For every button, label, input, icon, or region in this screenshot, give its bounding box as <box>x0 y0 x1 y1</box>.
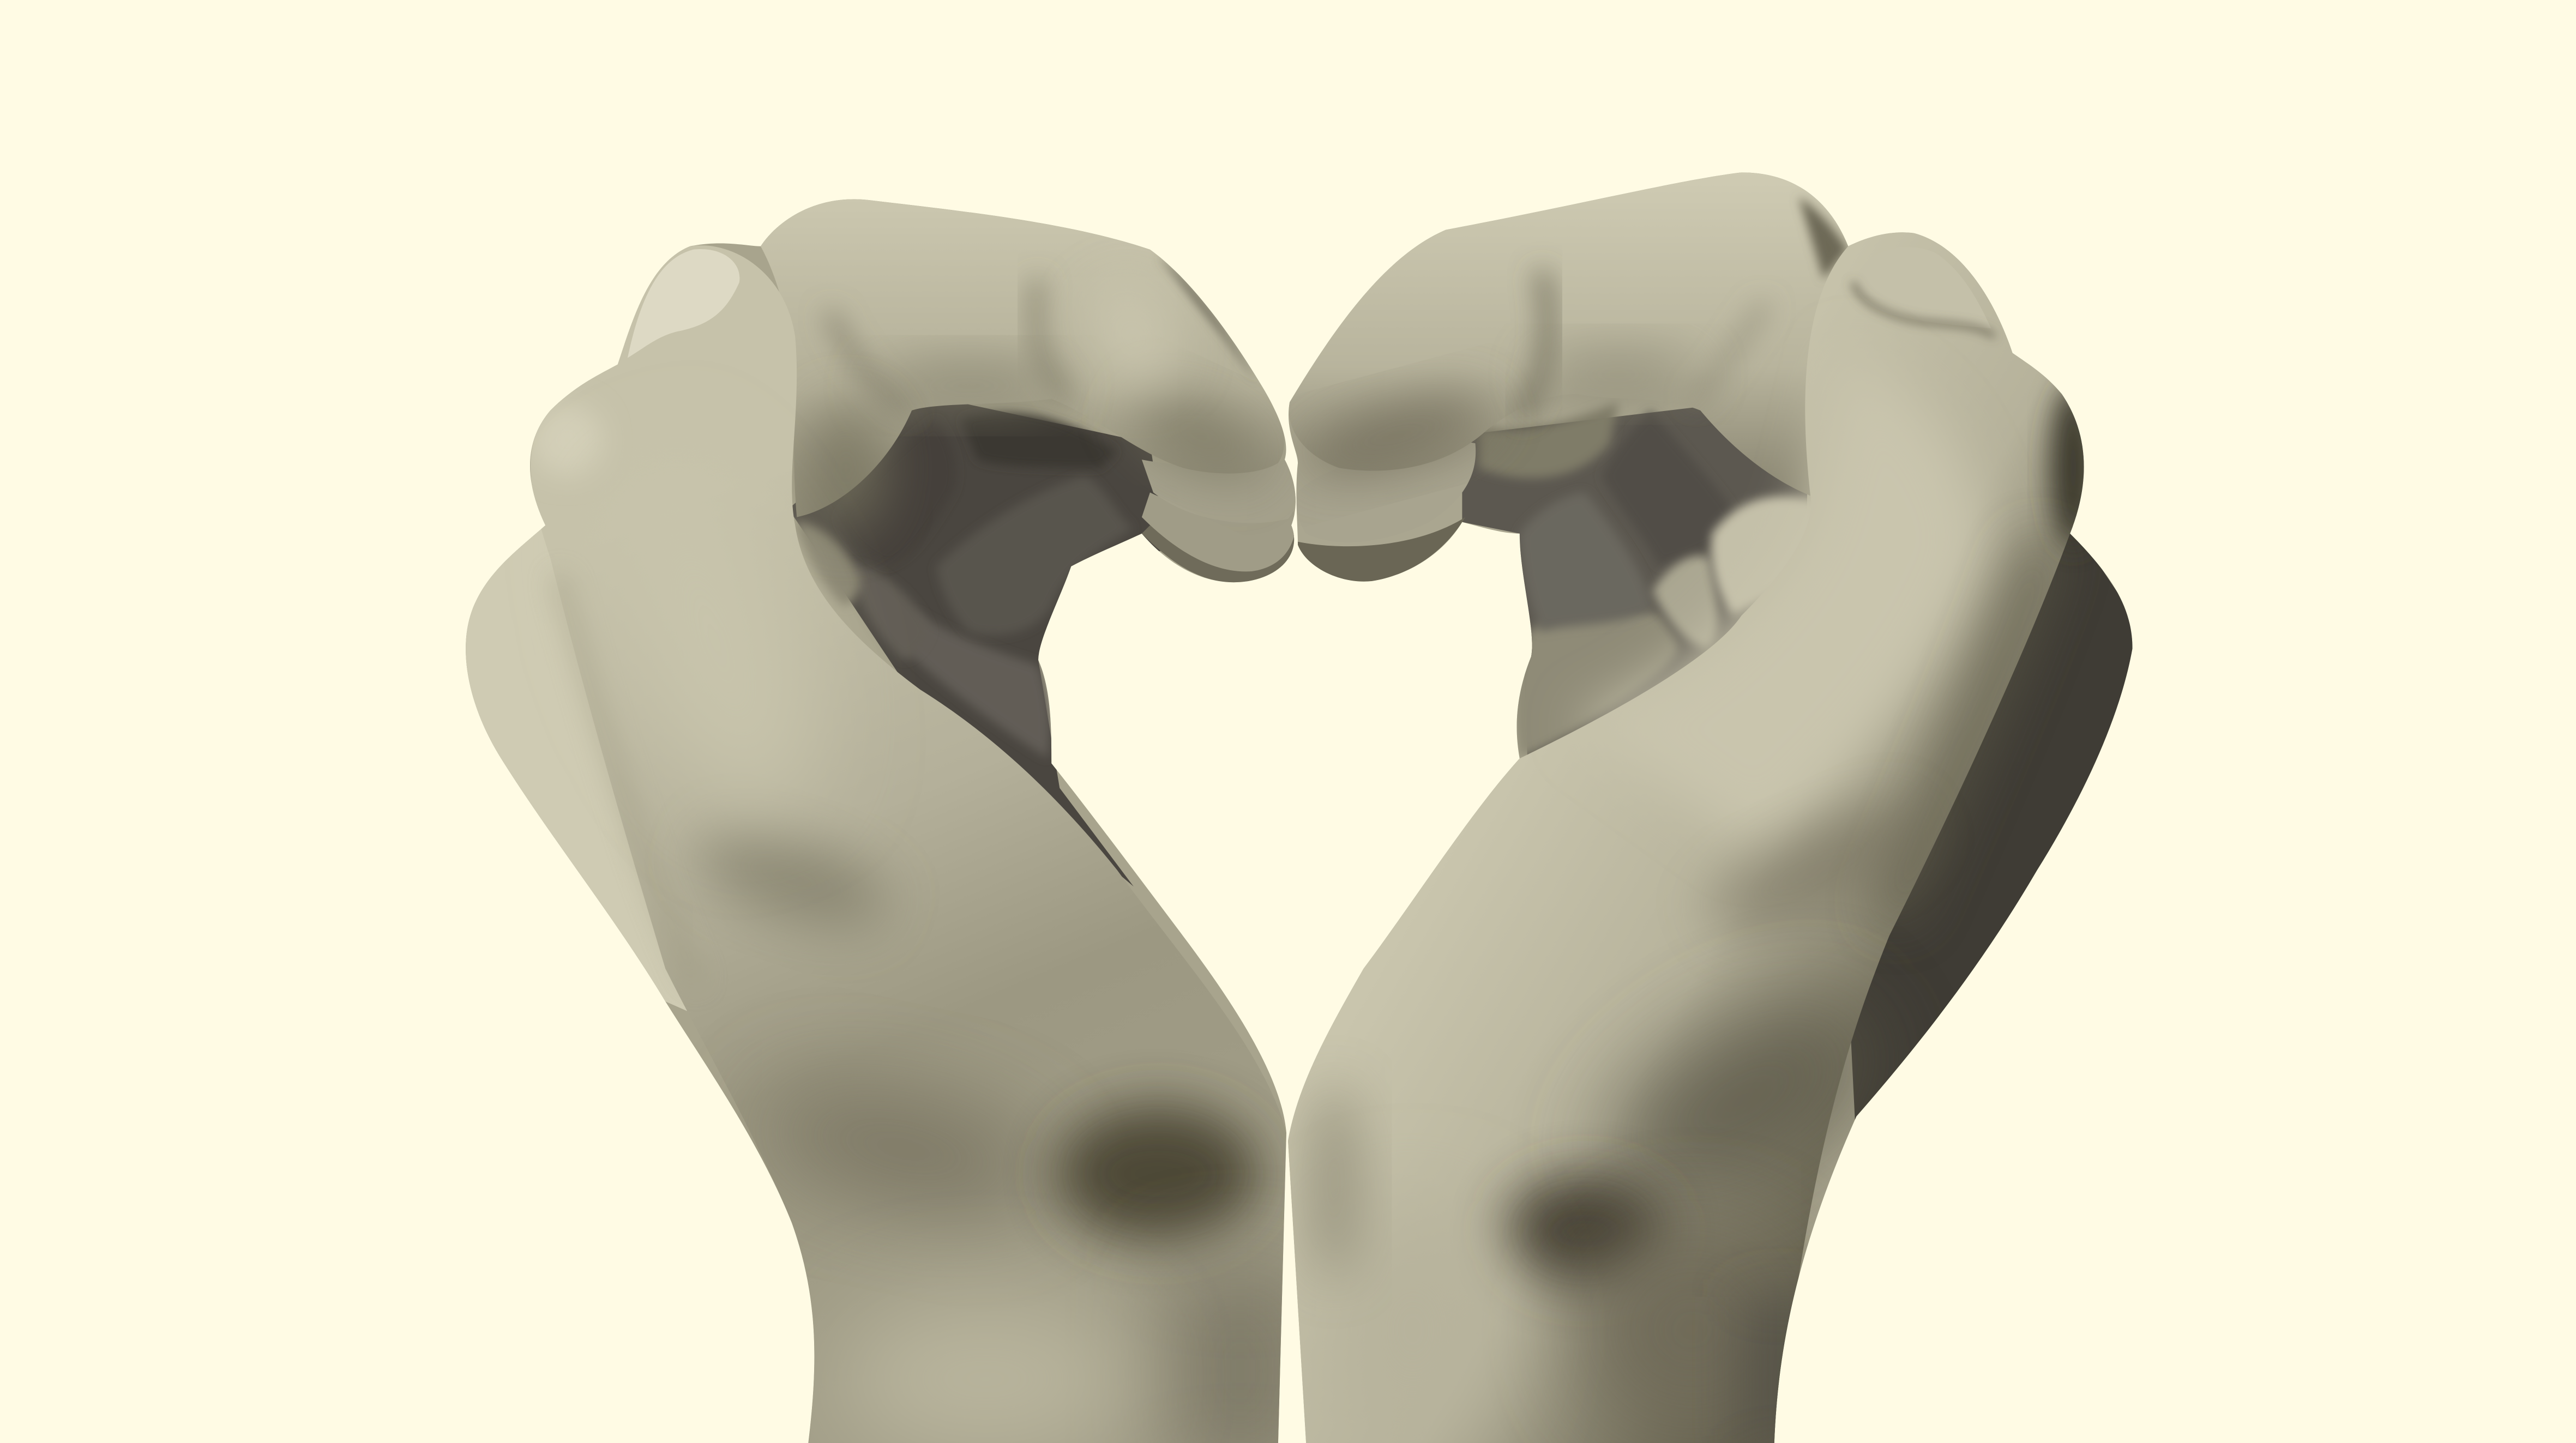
right hand: ring and middle fingertips <box>1297 442 1476 582</box>
right hand: thumb and heel of hand <box>1288 232 2084 1443</box>
right hand: palm finger folds <box>1478 402 1823 758</box>
right hand <box>1265 148 2152 1443</box>
left hand: finger shading <box>806 255 1280 534</box>
left hand: tonal shading <box>531 404 1314 1443</box>
right hand: palm interior <box>1462 394 1807 771</box>
right hand: tonal shading <box>1308 282 2096 1443</box>
left hand: thumb nail <box>628 249 739 358</box>
right hand: dark back of hand <box>1848 509 2144 1149</box>
left hand: ring and middle fingertips <box>1142 460 1299 582</box>
right hand: index finger group <box>1289 172 1848 496</box>
left hand: thumb and heel of hand <box>531 245 1286 1443</box>
left hand: palm finger folds <box>795 412 1134 758</box>
left hand: dark palm interior <box>789 394 1166 886</box>
right hand: finger shading <box>1293 197 1848 489</box>
left hand: index finger group <box>761 199 1284 517</box>
illustration: two hands forming a heart <box>466 172 2132 1443</box>
left hand: back of hand <box>466 529 687 1011</box>
right hand: thumb nail <box>1856 247 1991 328</box>
left hand <box>443 164 1314 1443</box>
